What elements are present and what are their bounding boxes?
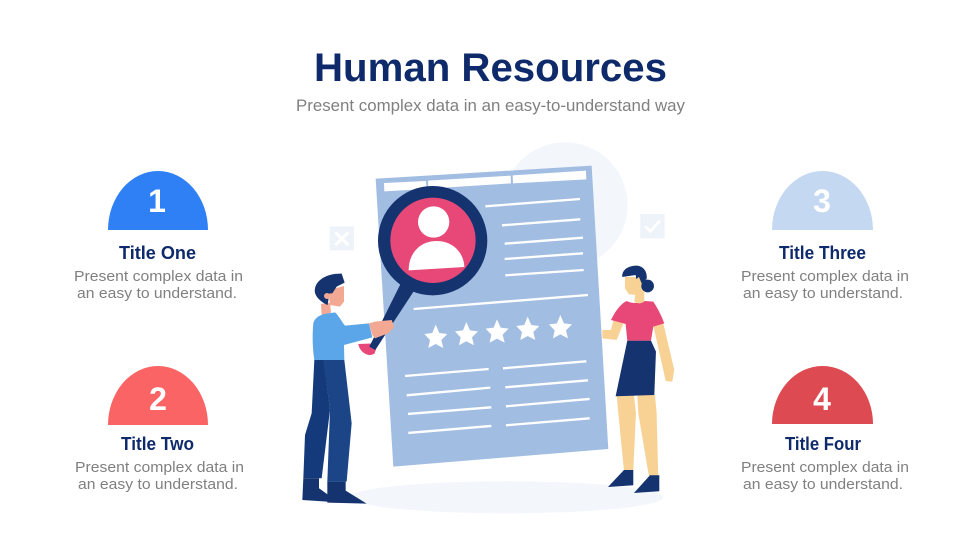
- title: Human Resources: [314, 46, 667, 90]
- badge: number 2: [108, 366, 208, 425]
- text: description one: an easy to understand.: [77, 285, 237, 302]
- panel: item four: [741, 366, 909, 493]
- woman legs: [617, 395, 658, 477]
- woman hair: [622, 266, 647, 283]
- woman skirt: [616, 341, 656, 396]
- woman face: [625, 277, 644, 295]
- rating stars: [424, 315, 572, 348]
- subtitle: Present complex data in an easy-to-understand way: [296, 96, 685, 115]
- woman top: [611, 301, 664, 341]
- man legs: [302, 360, 367, 504]
- panel: item one: [74, 171, 243, 302]
- man shoes: [302, 478, 367, 504]
- text: description three: an easy to understand.: [743, 285, 903, 302]
- text: description two: Present complex data in: [75, 459, 244, 476]
- text: description two: [75, 459, 244, 493]
- badge: number 3: [772, 171, 873, 230]
- woman arms: [602, 321, 674, 382]
- icon: cross box: [330, 226, 354, 250]
- text: description one: Present complex data in: [74, 268, 243, 285]
- document lines: [405, 199, 590, 433]
- text: description four: Present complex data in: [741, 459, 909, 476]
- heading: Title Two: Title Two: [121, 434, 194, 454]
- heading: Title Three: Title Three: [779, 243, 866, 263]
- badge: number 4: [772, 366, 873, 424]
- document header cells: [384, 171, 586, 191]
- man hair: [315, 274, 345, 305]
- text: description four: [741, 459, 909, 493]
- badge: number 2: 2: [149, 381, 167, 417]
- ground shadow: [350, 481, 663, 513]
- magnifying glass: [358, 186, 487, 355]
- man face: [328, 286, 344, 307]
- badge: number 4: 4: [813, 381, 831, 417]
- heading: Title One: Title One: [119, 243, 196, 263]
- man neck: [321, 303, 331, 315]
- heading: Title Four: Title Four: [785, 434, 861, 454]
- text: description one: [74, 268, 243, 302]
- panel: item two: [75, 366, 244, 493]
- woman figure: [602, 266, 674, 493]
- man figure: [302, 274, 394, 504]
- person icon: [409, 206, 464, 270]
- woman shoes: [608, 470, 659, 493]
- document: [376, 166, 608, 467]
- badge: number 1: 1: [148, 183, 166, 219]
- background circle: [502, 142, 628, 268]
- icon: check box: [640, 214, 665, 238]
- text: description four: an easy to understand.: [743, 476, 903, 493]
- man upper body: [313, 274, 394, 360]
- illustration: resume review: [302, 142, 674, 513]
- badge: number 3: 3: [813, 183, 831, 219]
- man sweater: [313, 312, 372, 360]
- text: description two: an easy to understand.: [78, 476, 238, 493]
- panel: item three: [741, 171, 909, 302]
- text: description three: [741, 268, 909, 302]
- man hand: [369, 320, 394, 338]
- badge: number 1: [108, 171, 208, 230]
- woman neck: [634, 292, 644, 303]
- text: description three: Present complex data in: [741, 268, 909, 285]
